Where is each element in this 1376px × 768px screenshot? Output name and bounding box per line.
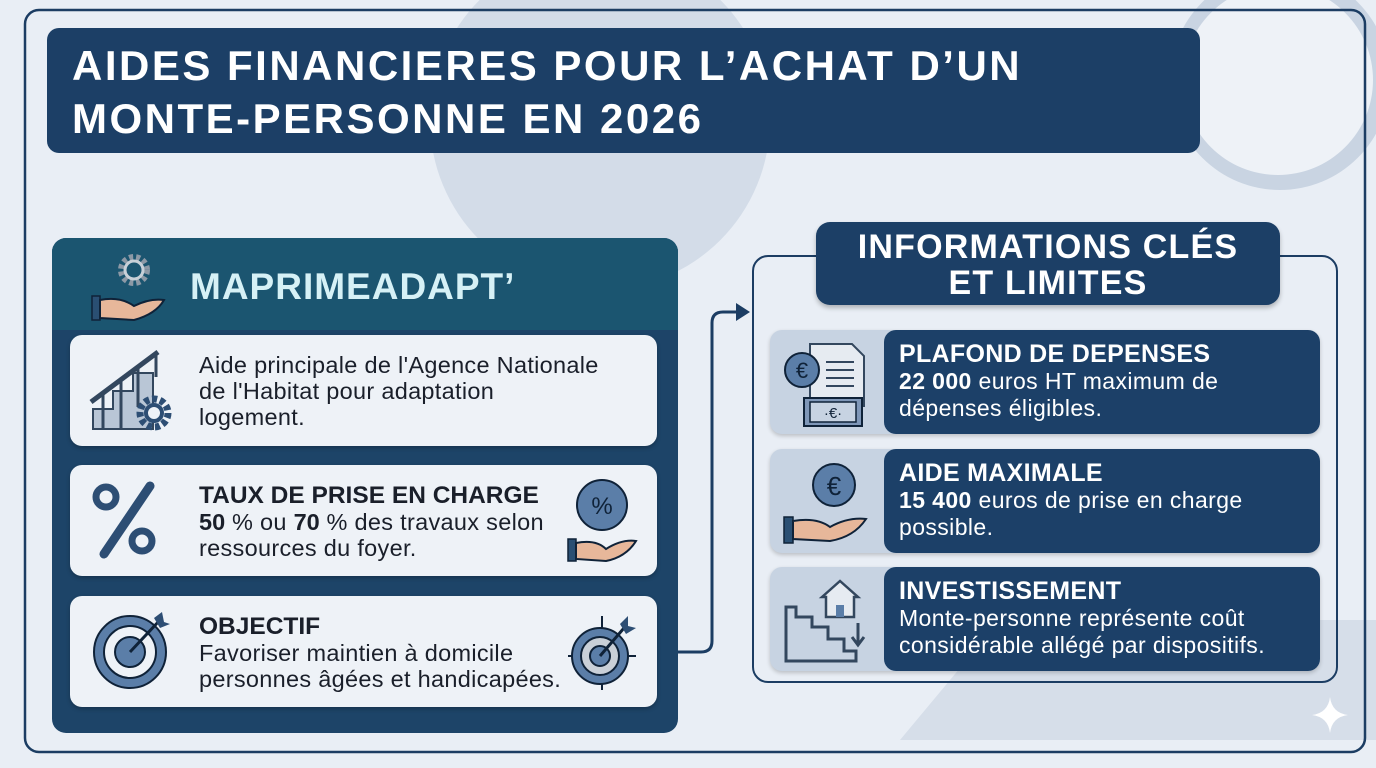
title [47, 28, 1200, 153]
icon: euro document: ·€· [824, 405, 842, 422]
icon: stairs gear [90, 350, 172, 430]
panel header [52, 238, 678, 330]
text: de l'Habitat pour adaptation [199, 378, 494, 404]
text: Monte-personne représente coût [899, 605, 1245, 631]
icon: target [93, 612, 170, 689]
text: possible. [899, 514, 993, 540]
heading: informations clés [816, 222, 1280, 305]
icon: euro document [784, 343, 865, 427]
icon: gear hand [91, 254, 166, 321]
text: OBJECTIF [199, 613, 320, 640]
icon: percent [92, 482, 156, 558]
text: considérable allégé par dispositifs. [899, 632, 1265, 658]
text [884, 567, 1320, 671]
text [199, 482, 544, 561]
text: 50 % ou 70 % des travaux selon [199, 509, 544, 535]
title: MONTE-PERSONNE EN 2026 [72, 95, 703, 142]
icon: target crosshair [568, 616, 636, 690]
icon: euro document: € [796, 358, 808, 383]
text: ressources du foyer. [199, 535, 417, 561]
text: Aide principale de l'Agence Nationale [199, 352, 599, 378]
text: TAUX DE PRISE EN CHARGE [199, 482, 539, 509]
icon: percent coin hand [567, 479, 638, 562]
row: investissement [770, 567, 1320, 671]
heading: informations clés: ET LIMITES [948, 264, 1148, 302]
card: taux [70, 465, 657, 576]
text [199, 613, 561, 692]
heading: informations clés: INFORMATIONS CLÉS [858, 228, 1238, 266]
card: aide principale [70, 335, 657, 446]
title: AIDES FINANCIERES POUR L’ACHAT D’UN [72, 42, 1022, 89]
text: Favoriser maintien à domicile [199, 640, 513, 666]
icon: euro hand [783, 463, 868, 544]
row: aide maximale [770, 449, 1320, 553]
text: dépenses éligibles. [899, 395, 1102, 421]
icon: euro hand: € [827, 471, 842, 501]
panel: MaPrimeAdapt [52, 238, 678, 733]
card: objectif [70, 596, 657, 707]
text [884, 449, 1320, 553]
icon: percent coin hand: % [591, 493, 613, 520]
text [199, 352, 599, 430]
text: personnes âgées et handicapées. [199, 666, 561, 692]
text: 22 000 euros HT maximum de [899, 368, 1218, 394]
text: INVESTISSEMENT [899, 577, 1121, 605]
text: AIDE MAXIMALE [899, 459, 1103, 487]
arrow: connector [678, 303, 750, 654]
panel heading: MAPRIMEADAPT’ [190, 266, 515, 307]
text [884, 330, 1320, 434]
text: PLAFOND DE DEPENSES [899, 340, 1210, 368]
icon: stairs house [784, 580, 866, 662]
panel: informations clés [752, 255, 1338, 683]
text: 15 400 euros de prise en charge [899, 487, 1243, 513]
text: logement. [199, 404, 305, 430]
row: plafond [770, 330, 1320, 434]
icon: sparkle [1312, 698, 1348, 732]
